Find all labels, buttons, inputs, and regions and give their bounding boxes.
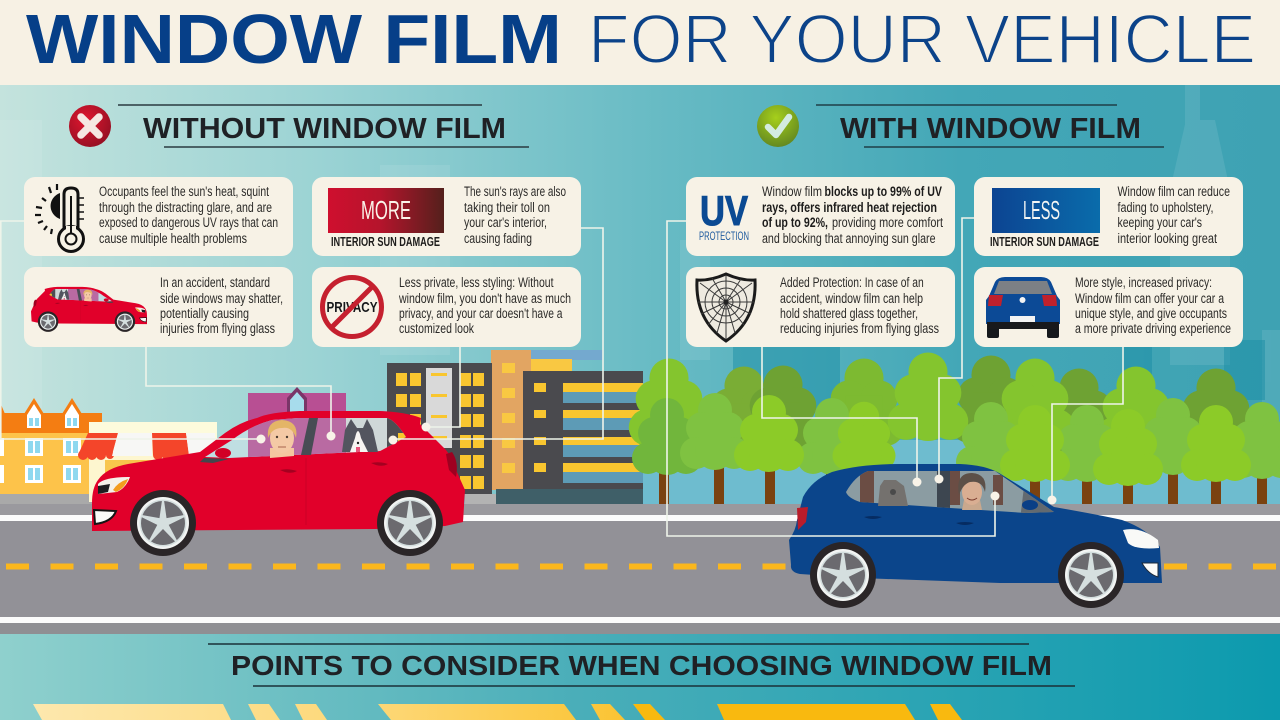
text: uv protection — [762, 184, 943, 246]
icon: no privacy sign — [322, 278, 382, 336]
panel: less privacy — [312, 267, 581, 347]
shop with awning — [78, 422, 217, 502]
text: shattering glass: potentially causing — [160, 306, 249, 321]
text: shattering glass: In an accident, standard — [160, 275, 270, 290]
text: less privacy: window film, you don't have as much — [398, 291, 571, 306]
text: fading: taking their toll on — [464, 200, 550, 215]
text: shattering glass — [160, 275, 283, 336]
icon: cracked shield — [697, 274, 755, 341]
text: uv protection: rays, offers infrared heat rejection — [762, 200, 937, 215]
panel: uv protection — [686, 177, 955, 256]
faint skyline — [0, 85, 1280, 430]
text: fading: your car's interior, — [464, 215, 547, 230]
tree row: middle — [632, 393, 1280, 482]
text: less privacy: privacy, and your car doesn't have a — [399, 306, 563, 321]
tree trunks — [659, 465, 1267, 504]
text: heat and glare — [99, 184, 278, 246]
icon: sun and thermometer — [35, 184, 84, 252]
text: uv protection: Window film — [762, 184, 822, 199]
text: reduce fading: interior looking great — [1118, 231, 1217, 246]
icon: more badge: MORE — [361, 197, 411, 225]
text: uv protection: blocks up to 99% of UV — [824, 184, 942, 199]
icon: red cross — [69, 105, 111, 147]
yellow stripes — [33, 704, 962, 720]
icon: more badge — [328, 188, 444, 249]
heading: without window film: WITHOUT WINDOW FILM — [143, 113, 506, 145]
blue car — [789, 464, 1162, 608]
icon: less badge: LESS — [1023, 197, 1060, 225]
orange building — [491, 350, 603, 490]
panel: added protection — [686, 267, 955, 347]
text: added protection — [780, 275, 939, 336]
icon: less badge — [990, 188, 1100, 249]
text: style and privacy: More style, increased privacy: — [1075, 275, 1212, 290]
icon: blue car rear — [986, 277, 1060, 338]
icon: green check — [757, 105, 799, 147]
yellow house — [0, 398, 102, 504]
text: added protection: accident, window film can help — [780, 291, 923, 306]
connector lines: without film — [1, 221, 603, 444]
striped building — [496, 371, 643, 504]
text: fading — [464, 184, 566, 246]
panel: heat and glare — [24, 177, 293, 256]
connector lines: with film — [667, 218, 1123, 536]
text: reduce fading — [1118, 184, 1230, 246]
text: uv protection: providing more comfort — [832, 215, 943, 230]
lane dashes — [6, 564, 1280, 570]
skyline far right — [733, 340, 1265, 410]
bottom band — [0, 634, 1280, 720]
dark tower with windows — [387, 363, 496, 504]
panel: less interior sun damage — [974, 177, 1243, 256]
title: for your vehicle: FOR YOUR VEHICLE — [588, 0, 1256, 78]
text: style and privacy: unique style, and give occupants — [1075, 306, 1227, 321]
icon: no privacy sign: PRIVACY — [326, 299, 378, 316]
icon: less badge: INTERIOR SUN DAMAGE — [990, 235, 1099, 249]
icon: uv protection: UV — [700, 187, 748, 234]
text: reduce fading: keeping your car's — [1118, 215, 1202, 230]
panel: style and privacy — [974, 267, 1243, 347]
heading: points to consider — [208, 644, 1075, 686]
text: added protection: Added Protection: In case of an — [780, 275, 924, 290]
sky strip behind trees — [640, 440, 1280, 506]
panel: more interior sun damage — [312, 177, 581, 256]
text: shattering glass: side windows may shatter, — [160, 291, 283, 306]
text: fading: causing fading — [464, 231, 532, 246]
text: less privacy — [398, 275, 571, 336]
panel: shattering glass — [24, 267, 293, 347]
road — [0, 504, 1280, 634]
text: less privacy: Less private, less styling: Without — [399, 275, 554, 290]
text: added protection: reducing injuries from flying glass — [780, 321, 939, 336]
icon: uv protection: PROTECTION — [699, 229, 749, 243]
title: window film: WINDOW FILM — [26, 0, 562, 78]
sky background — [0, 85, 1280, 515]
icon: small red car — [31, 281, 147, 332]
text: style and privacy: Window film can offer your car a — [1075, 291, 1224, 306]
text: reduce fading: fading to upholstery, — [1118, 200, 1214, 215]
tree row: back — [629, 352, 1256, 457]
text: heat and glare: through the distracting glare, and are — [99, 200, 272, 215]
heading: without window film — [118, 105, 529, 147]
text: heat and glare: exposed to dangerous UV rays that can — [99, 215, 278, 230]
heading: with window film: WITH WINDOW FILM — [840, 113, 1141, 145]
text: heat and glare: Occupants feel the sun's heat, squint — [99, 184, 269, 199]
text: shattering glass: injuries from flying glass — [160, 321, 275, 336]
text: less privacy: customized look — [399, 321, 474, 336]
text: added protection: hold shattered glass together, — [780, 306, 918, 321]
text: uv protection: of up to 92%, — [762, 215, 828, 230]
text: fading: The sun's rays are also — [464, 184, 566, 199]
tree row: front — [734, 395, 1251, 486]
purple building — [248, 387, 346, 433]
text: style and privacy — [1075, 275, 1231, 336]
heading: points to consider: POINTS TO CONSIDER WHEN CHOOSING WINDOW FILM — [231, 650, 1052, 681]
red car — [92, 393, 465, 556]
title band — [0, 0, 1280, 85]
text: uv protection: and blocking that annoying sun glare — [762, 231, 936, 246]
text: heat and glare: cause multiple health problems — [99, 231, 247, 246]
heading: with window film — [816, 105, 1164, 147]
text: reduce fading: Window film can reduce — [1118, 184, 1230, 199]
icon: more badge: INTERIOR SUN DAMAGE — [331, 235, 440, 249]
text: style and privacy: a more private driving experience — [1075, 321, 1231, 336]
